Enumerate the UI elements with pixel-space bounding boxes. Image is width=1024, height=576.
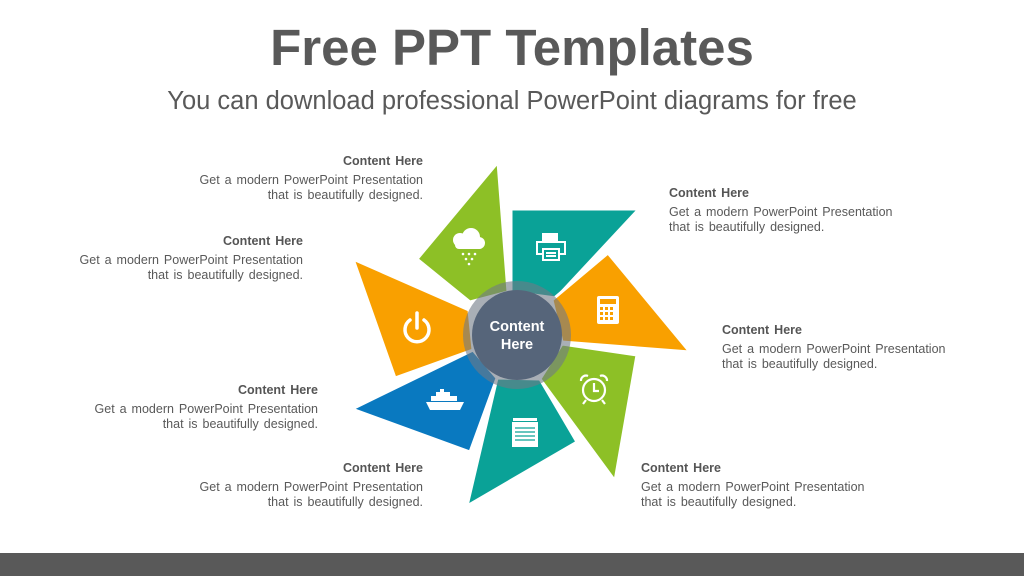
icon: cloud rain	[453, 228, 485, 265]
petal: green cloud	[417, 162, 508, 302]
text: top-right: Content Here	[669, 186, 749, 200]
subtitle: You can download professional PowerPoint diagrams for free	[167, 87, 857, 115]
icon: notepad	[512, 418, 538, 447]
icon: alarm clock	[581, 376, 607, 404]
text: top-left: Get a modern PowerPoint Presentation	[200, 173, 423, 187]
text: left upper: Get a modern PowerPoint Presentation	[80, 253, 303, 267]
text: left lower: that is beautifully designed.	[163, 417, 318, 431]
text: bottom-left: Content Here	[343, 461, 423, 475]
text: left lower: Content Here	[238, 383, 318, 397]
text: left lower	[95, 383, 318, 431]
title: Free PPT Templates	[270, 19, 754, 76]
petal: teal notepad	[467, 378, 577, 506]
text: bottom-right: Content Here	[641, 461, 721, 475]
text: right: that is beautifully designed.	[722, 357, 877, 371]
text: top-right	[669, 186, 892, 234]
text: right: Content Here	[722, 323, 802, 337]
text: bottom-right: that is beautifully designed.	[641, 495, 796, 509]
text: left upper: Content Here	[223, 234, 303, 248]
center circle: Here	[501, 337, 533, 353]
icon: ship	[426, 389, 464, 410]
text: top-left: Content Here	[343, 154, 423, 168]
text: bottom-left: that is beautifully designed.	[268, 495, 423, 509]
icon: power	[405, 313, 429, 342]
text: right: Get a modern PowerPoint Presentation	[722, 342, 945, 356]
petal: orange calculator	[552, 253, 690, 352]
petal: teal printer	[511, 209, 639, 298]
text: right	[722, 323, 945, 371]
text: top-left: that is beautifully designed.	[268, 188, 423, 202]
text: top-right: that is beautifully designed.	[669, 220, 824, 234]
text: bottom-right	[641, 461, 864, 509]
text: bottom-right: Get a modern PowerPoint Presentation	[641, 480, 864, 494]
icon: printer	[537, 234, 565, 260]
text: left lower: Get a modern PowerPoint Presentation	[95, 402, 318, 416]
petal: green alarm	[540, 344, 637, 481]
center circle	[463, 281, 571, 389]
text: top-right: Get a modern PowerPoint Presentation	[669, 205, 892, 219]
footer bar	[0, 553, 1024, 576]
text: bottom-left	[200, 461, 423, 509]
center circle: Content	[490, 319, 545, 335]
text: bottom-left: Get a modern PowerPoint Presentation	[200, 480, 423, 494]
icon: calculator	[597, 296, 619, 324]
petal: orange power	[353, 259, 473, 378]
petal: blue ship	[352, 350, 497, 452]
text: top-left	[200, 154, 423, 202]
text: left upper: that is beautifully designed.	[148, 268, 303, 282]
text: left upper	[80, 234, 303, 282]
